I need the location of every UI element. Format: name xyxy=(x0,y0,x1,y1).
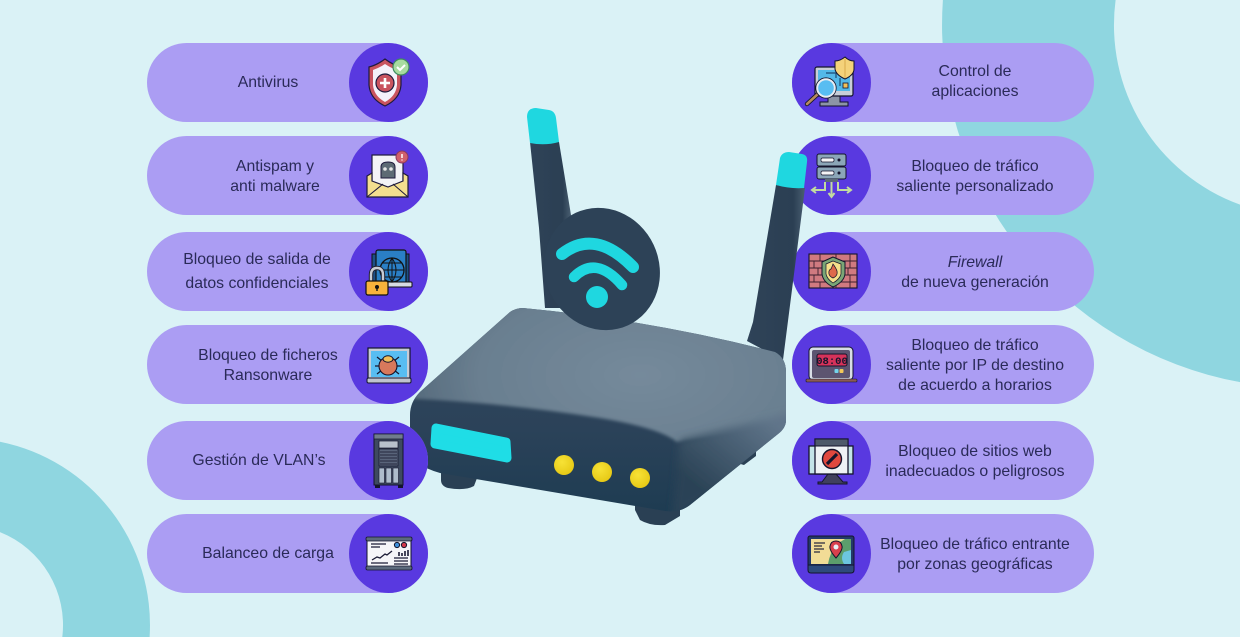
label: datos confidenciales xyxy=(183,251,331,292)
label: saliente personalizado xyxy=(896,158,1054,195)
item: Bloqueo de ficheros xyxy=(147,325,428,404)
label: saliente personalizado: saliente personalizado xyxy=(896,178,1054,195)
label: IP de destino de acuerdo a horarios: de acuerdo a horarios xyxy=(898,377,1052,394)
item: Gestión de VLAN's xyxy=(147,421,428,500)
icon: digital clock: 08:00 xyxy=(816,356,848,368)
icon: monitor with magnifier and shield xyxy=(792,43,871,122)
wifi disc xyxy=(524,189,680,349)
antenna: left xyxy=(527,108,571,308)
item: Control de aplicaciones xyxy=(792,43,1094,122)
item: Balanceo de carga xyxy=(147,514,428,593)
label: Ransonware: Bloqueo de ficheros xyxy=(198,347,338,364)
router feet xyxy=(441,445,756,525)
item: Bloqueo por IP y horarios xyxy=(792,325,1094,404)
label: Control de aplicaciones xyxy=(932,63,1018,100)
LEDs xyxy=(554,455,650,488)
icon: chart board xyxy=(349,514,428,593)
item: Bloqueo de tráfico saliente personalizado xyxy=(792,136,1094,215)
icon: laptop with bug xyxy=(349,325,428,404)
label: Antivirus: Antivirus xyxy=(238,74,298,91)
label: Gestión de VLAN's: Gestión de VLAN’s xyxy=(192,452,326,469)
label: Antispam xyxy=(230,158,320,195)
item: Bloqueo de salida xyxy=(147,232,428,311)
label: Firewall de nueva generación xyxy=(901,254,1049,291)
icon: server with arrows xyxy=(798,136,871,215)
label: IP de destino de acuerdo a horarios: Bloqueo de tráfico xyxy=(911,337,1039,354)
label: zonas geográficas: Bloqueo de tráfico entrante xyxy=(880,536,1070,553)
label: sitios web xyxy=(885,443,1065,480)
item: Firewall xyxy=(792,232,1094,311)
label: IP de destino de acuerdo a horarios xyxy=(886,337,1064,394)
label: IP de destino de acuerdo a horarios: saliente por IP de destino xyxy=(886,357,1064,374)
icon: shield with check xyxy=(349,43,428,122)
label: datos confidenciales: Bloqueo de salida de xyxy=(183,251,331,268)
label: Firewall de nueva generación: Firewall xyxy=(948,254,1002,271)
label: Control de aplicaciones: aplicaciones xyxy=(932,83,1018,100)
label: sitios web: inadecuados o peligrosos xyxy=(885,463,1065,480)
label: Control de aplicaciones: Control de xyxy=(939,63,1011,80)
icon: laptop with map pin xyxy=(792,514,871,593)
label: zonas geográficas xyxy=(880,536,1070,573)
label: Ransonware xyxy=(198,347,338,384)
icon: padlock and globe xyxy=(349,232,428,311)
label: Antispam: Antispam y xyxy=(236,158,314,175)
label: zonas geográficas: por zonas geográficas xyxy=(897,556,1053,573)
router top face xyxy=(414,308,786,444)
icon: server rack xyxy=(349,421,428,500)
item: Bloqueo de sitios web xyxy=(792,421,1094,500)
router illustration xyxy=(410,108,808,526)
label: Firewall de nueva generación: de nueva generación xyxy=(901,274,1049,291)
label: Antispam: anti malware xyxy=(230,178,320,195)
display bar xyxy=(435,428,507,458)
label: Balanceo de carga: Balanceo de carga xyxy=(202,545,334,562)
label: Ransonware: Ransonware xyxy=(224,367,312,384)
item: Antispam xyxy=(147,136,428,215)
icon: envelope with skull xyxy=(349,136,428,215)
label: datos confidenciales: datos confidenciales xyxy=(185,275,329,292)
label: saliente personalizado: Bloqueo de tráfico xyxy=(911,158,1039,175)
item: Antivirus xyxy=(147,43,428,122)
icon: brick wall with shield xyxy=(793,232,871,311)
label: sitios web: Bloqueo de sitios web xyxy=(898,443,1052,460)
router body xyxy=(410,308,786,512)
icon: digital clock xyxy=(792,325,871,404)
icon: monitor with forbidden sign xyxy=(792,421,871,500)
antenna: right xyxy=(747,152,807,360)
item: Bloqueo por zonas geográficas xyxy=(792,514,1094,593)
